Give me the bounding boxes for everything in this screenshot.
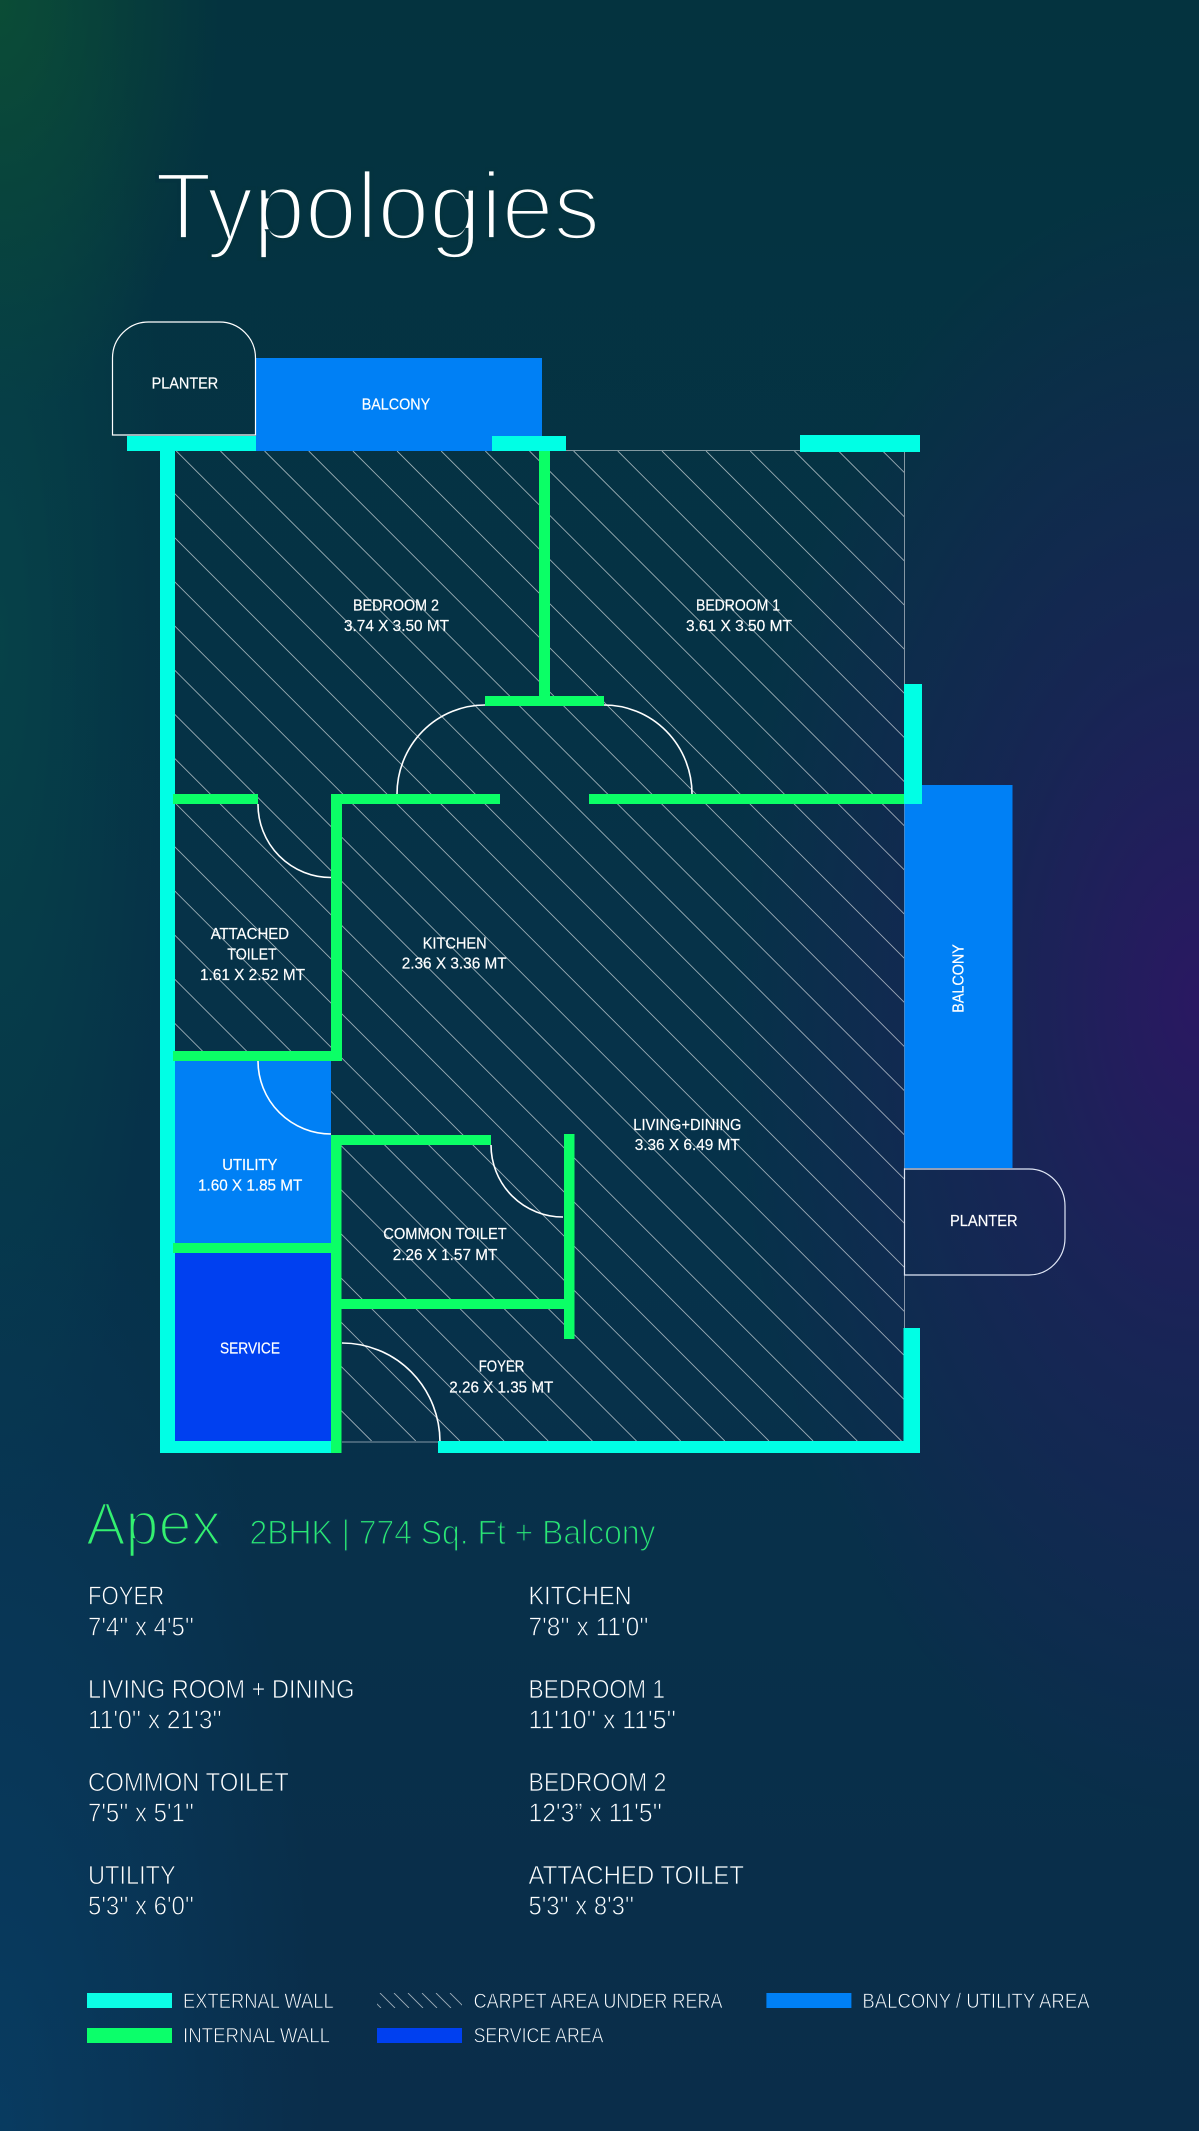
room labels: 1.60 X 1.85 MT	[198, 1178, 303, 1195]
room dimensions: left column: 5'3'' x 6'0''	[88, 1893, 194, 1921]
carpet area outline	[342, 450, 904, 1442]
room dimensions: right column: KITCHEN	[528, 1583, 632, 1611]
room labels: 3.61 X 3.50 MT	[686, 618, 792, 635]
top planter	[112, 322, 256, 435]
room labels: TOILET	[227, 946, 277, 963]
legend: balcony and utility area	[766, 1989, 1090, 2013]
room labels: KITCHEN	[423, 935, 487, 952]
room dimensions: left column: 7'4'' x 4'5''	[88, 1613, 194, 1641]
legend: external wall: EXTERNAL WALL	[183, 1989, 334, 2013]
room labels: 1.61 X 2.52 MT	[200, 967, 305, 984]
room labels: 2.26 X 1.57 MT	[393, 1247, 498, 1264]
carpet area hatching	[175, 451, 904, 1441]
room dimensions: right column: ATTACHED TOILET	[528, 1862, 744, 1890]
legend: carpet area: CARPET AREA UNDER RERA	[474, 1989, 723, 2013]
room labels: PLANTER	[950, 1213, 1018, 1230]
legend: balcony and utility area: BALCONY / UTILITY AREA	[862, 1989, 1090, 2013]
room labels: 2.26 X 1.35 MT	[449, 1379, 554, 1396]
door swings	[258, 705, 692, 1442]
room dimensions: left column: 11'0'' x 21'3''	[88, 1707, 222, 1735]
room dimensions: right column: 5'3'' x 8'3''	[528, 1893, 634, 1921]
legend: service area: SERVICE AREA	[474, 2024, 604, 2048]
legend: internal wall: INTERNAL WALL	[183, 2024, 330, 2048]
room labels: 3.36 X 6.49 MT	[635, 1137, 740, 1154]
legend: service area	[377, 2024, 604, 2048]
room labels: ATTACHED	[211, 926, 289, 943]
legend	[87, 1992, 1090, 2043]
room labels: BALCONY	[362, 396, 430, 413]
room labels: BEDROOM 2	[353, 598, 439, 615]
unit name: Apex	[86, 1490, 221, 1557]
room labels: BEDROOM 1	[696, 598, 780, 615]
legend: internal wall	[87, 2024, 330, 2048]
room dimensions: right column: BEDROOM 1	[528, 1676, 665, 1704]
utility area	[175, 1061, 331, 1243]
service area	[175, 1253, 331, 1441]
room dimensions: left column: FOYER	[88, 1583, 164, 1611]
room dimensions: right column: 12'3” x 11'5''	[528, 1800, 662, 1828]
room dimensions: right column: BEDROOM 2	[528, 1769, 666, 1797]
room labels: FOYER	[479, 1358, 524, 1375]
right planter	[904, 1169, 1065, 1275]
legend: external wall	[87, 1989, 334, 2013]
room labels: BALCONY	[951, 944, 968, 1013]
legend: carpet area	[377, 1993, 722, 2008]
internal walls	[173, 451, 904, 1453]
room labels: 3.74 X 3.50 MT	[344, 618, 449, 635]
top balcony	[256, 358, 542, 451]
room dimensions: right column: 7'8'' x 11'0''	[528, 1613, 649, 1641]
room labels: 2.36 X 3.36 MT	[402, 956, 507, 973]
room labels: PLANTER	[152, 376, 218, 393]
room dimensions: left column	[88, 1583, 354, 1921]
room dimensions: left column: COMMON TOILET	[88, 1769, 289, 1797]
title: Typologies	[155, 153, 600, 260]
unit summary: 2BHK | 774 Sq. Ft + Balcony	[250, 1514, 656, 1552]
room dimensions: left column: UTILITY	[88, 1862, 176, 1890]
floor plan	[112, 321, 1066, 1453]
room dimensions: left column: LIVING ROOM + DINING	[88, 1676, 354, 1704]
right balcony	[904, 785, 1012, 1168]
room labels	[152, 376, 1018, 1396]
room labels: COMMON TOILET	[383, 1226, 507, 1243]
external walls	[127, 435, 922, 1453]
room dimensions: right column	[528, 1583, 744, 1921]
room dimensions: right column: 11'10'' x 11'5''	[528, 1707, 676, 1735]
room labels: SERVICE	[220, 1340, 280, 1357]
room labels: UTILITY	[222, 1157, 278, 1174]
room labels: LIVING+DINING	[633, 1117, 742, 1134]
room dimensions: left column: 7'5'' x 5'1''	[88, 1800, 194, 1828]
